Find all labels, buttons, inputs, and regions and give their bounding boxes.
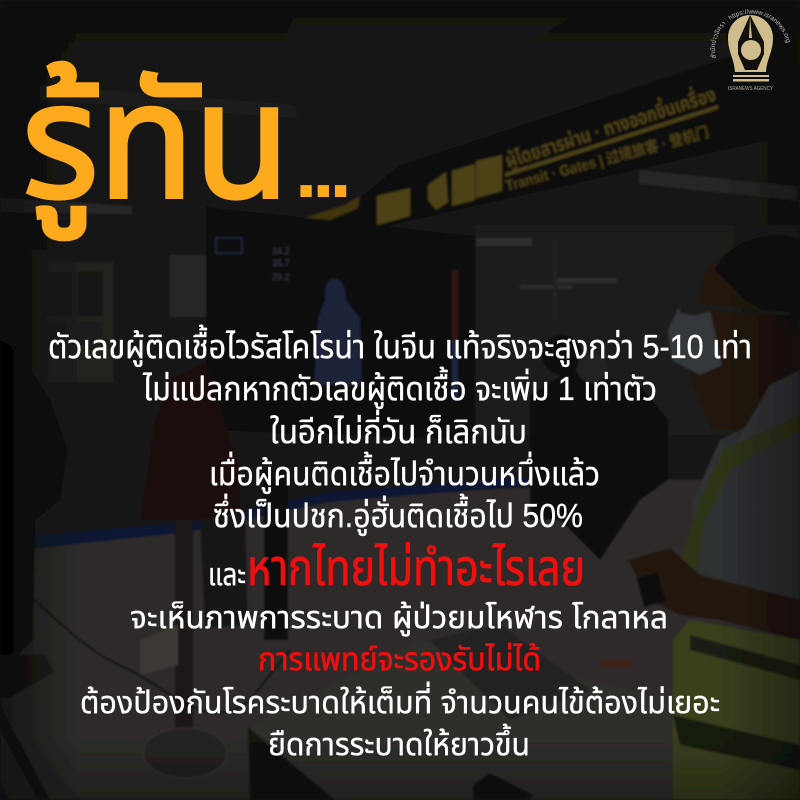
face mask: [668, 305, 722, 375]
line 9: ต้องป้องกันโรคระบาดให้เต็มที่ จำนวนคนไข้ต้องไม่เยอะ: [80, 681, 720, 720]
ceiling: [0, 0, 800, 260]
thermal monitor: [206, 207, 475, 440]
yellow plane sign: [305, 196, 360, 220]
logo caption: ISRANEWS AGENCY: [728, 86, 774, 92]
thermal monitor: 35.7: [272, 258, 290, 268]
vest: [677, 415, 800, 570]
back wall and windows: [0, 170, 800, 560]
line 5: ซึ่งเป็นปชก.อู่ฮั่นติดเชื้อไป 50%: [213, 493, 583, 536]
left person: [0, 340, 68, 800]
thermal monitor: 29.2: [272, 272, 290, 282]
logo ring text: สำนักข่าวอิศรา : https://www.isranews.org: [710, 9, 790, 58]
floor: [0, 480, 800, 800]
logo: Isranews Agency: [710, 9, 790, 92]
line 1: ตัวเลขผู้ติดเชื้อไวรัสโคโรน่า ในจีน แท้จริงจะสูงกว่า 5-10 เท่า: [48, 324, 752, 367]
body text block: [48, 324, 752, 762]
title: รู้ทัน: [22, 52, 290, 239]
title ellipsis: ...: [295, 125, 347, 214]
sign line: [505, 105, 718, 177]
person in red coat: [140, 362, 248, 675]
line 6: และ: [208, 557, 246, 592]
shirt: [693, 400, 800, 610]
glasses: [678, 298, 790, 316]
logo seal: pen nib bulb: [728, 15, 773, 72]
airport direction sign: [330, 35, 800, 240]
protective suit figure: [314, 278, 362, 385]
line 10: ยืดการระบาดให้ยาวขึ้น: [268, 723, 530, 762]
line 4: เมื่อผู้คนติดเชื้อไปจำนวนหนึ่งแล้ว: [209, 451, 600, 494]
line 2: ไม่แปลกหากตัวเลขผู้ติดเชื้อ จะเพิ่ม 1 เท่าตัว: [142, 366, 657, 409]
highlighted line 8: การแพทย์จะรองรับไม่ได้: [258, 641, 541, 677]
thermal monitor: 34.2: [272, 246, 290, 256]
arm: [628, 548, 800, 640]
line 3: ในอีกไม่กี่วัน ก็เลิกนับ: [270, 409, 527, 450]
sign text: ผู้โดยสารผ่าน · ทางออกขึ้นเครื่อง: [502, 80, 719, 173]
line 7: จะเห็นภาพการระบาด ผู้ป่วยมโหฬาร โกลาหล: [130, 600, 668, 636]
table with equipment: [248, 625, 673, 800]
airport direction sign: Transit · Gates | 过境旅客 · 登机门: [503, 123, 711, 195]
highlighted headline: หากไทยไม่ทำอะไรเลย: [247, 540, 585, 596]
vest reflective bands: [673, 715, 800, 770]
sign icons: [377, 155, 502, 225]
man in high-visibility vest: [628, 235, 800, 800]
masked people mid queue: [530, 335, 668, 560]
queue barrier: [0, 470, 620, 778]
